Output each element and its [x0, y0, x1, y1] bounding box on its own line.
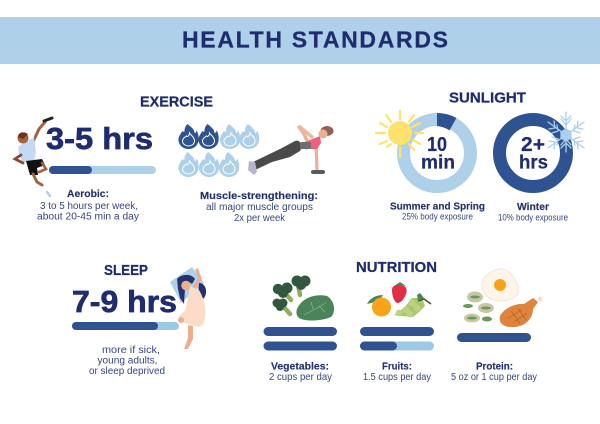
bars: fruits	[360, 327, 434, 350]
icon: orange, strawberry, grapes	[367, 282, 431, 317]
text: sleep note: more if sick,	[102, 345, 160, 356]
heading: exercise: EXERCISE	[140, 94, 213, 110]
panel: sunlight	[376, 90, 584, 222]
text: vegetables: Vegetables:	[271, 360, 329, 372]
panel: nutrition	[264, 259, 542, 383]
donut: 2+ hrs	[500, 120, 566, 186]
text: winter	[498, 201, 568, 222]
progress bar: sleep	[72, 322, 179, 330]
icon: leaping runner	[15, 118, 52, 196]
text: sleep note: young adults,	[98, 356, 158, 366]
text: fruits: Fruits:	[382, 360, 412, 372]
text: vegetables	[269, 360, 332, 383]
heading: nutrition: NUTRITION	[356, 259, 437, 276]
donut: 10 min	[404, 113, 470, 186]
icon: sleeping woman	[170, 267, 206, 349]
icon: egg, edamame, chicken leg	[463, 269, 542, 327]
text: vegetables: 2 cups per day	[269, 372, 332, 383]
text: protein: Protein:	[476, 360, 513, 372]
icon: sun	[376, 111, 423, 157]
text: aerobic: 3 to 5 hours per week,	[40, 201, 138, 212]
donut: 10 min: 10	[427, 134, 447, 156]
text: muscle-strengthening: all major muscle groups	[206, 202, 313, 213]
heading: sleep: SLEEP	[104, 262, 148, 279]
text: muscle-strengthening	[200, 190, 318, 224]
text: sleep note: or sleep deprived	[89, 366, 165, 377]
text: summer and spring	[390, 200, 485, 222]
text: fruits: 1.5 cups per day	[363, 372, 431, 383]
big number: 7-9 hrs: 7-9 hrs	[72, 284, 177, 319]
text: fruits	[363, 360, 431, 383]
panel: exercise	[15, 94, 334, 224]
icon: flames	[178, 124, 259, 177]
panel: sleep	[72, 262, 206, 377]
header band	[0, 17, 600, 64]
heading: sunlight: SUNLIGHT	[449, 90, 526, 106]
text: summer and spring: Summer and Spring	[390, 200, 485, 212]
text: sleep note	[89, 345, 165, 377]
bar: protein	[457, 333, 531, 342]
progress bar: aerobic	[49, 166, 156, 174]
text: aerobic: about 20-45 min a day	[37, 212, 139, 222]
text: muscle-strengthening: Muscle-strengthening:	[200, 190, 318, 202]
donut: 2+ hrs: 2+	[521, 134, 545, 156]
bars: vegetables	[264, 327, 337, 350]
text: winter: 10% body exposure	[498, 212, 568, 222]
text: protein: 5 oz or 1 cup per day	[451, 372, 537, 383]
text: aerobic	[37, 188, 139, 222]
text: winter: Winter	[517, 201, 549, 213]
text: muscle-strengthening: 2x per week	[234, 213, 286, 224]
icon: snowflake	[548, 112, 584, 152]
donut: 10 min: min	[421, 152, 455, 174]
big number: 3-5 hrs: 3-5 hrs	[46, 121, 153, 156]
text: aerobic: Aerobic:	[67, 188, 109, 200]
title: HEALTH STANDARDS	[182, 26, 448, 52]
icon: broccoli and greens	[272, 276, 334, 321]
text: protein	[451, 360, 537, 383]
text: summer and spring: 25% body exposure	[402, 212, 473, 222]
donut: 2+ hrs: hrs	[519, 152, 548, 174]
icon: woman doing plank row	[248, 126, 334, 175]
